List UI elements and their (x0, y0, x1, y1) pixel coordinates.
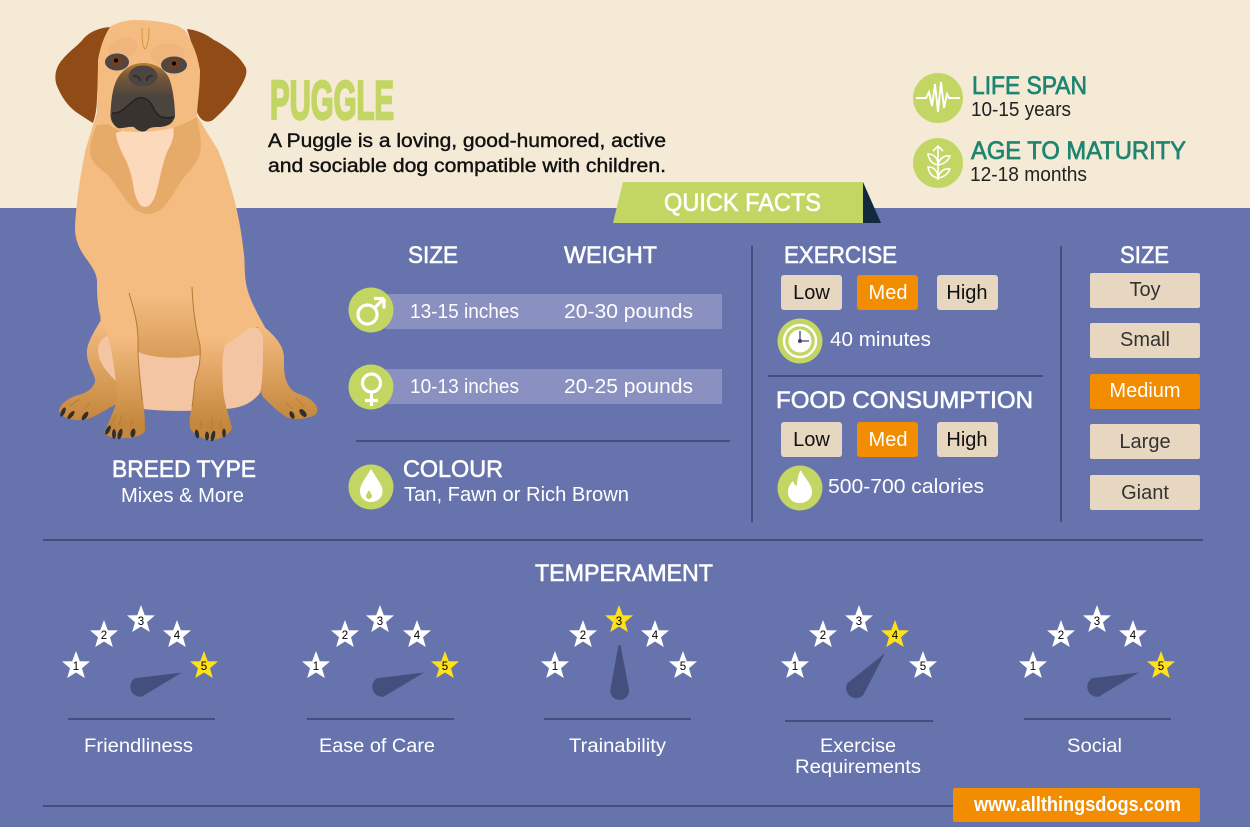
icon: age to maturity (913, 138, 963, 188)
exercise: 40 minutes (830, 329, 931, 351)
exercise level buttons: Low (793, 282, 830, 304)
breed type: Mixes & More (121, 485, 244, 507)
male row: 13-15 inches (410, 301, 519, 323)
gauge: social: 1 (1030, 661, 1036, 673)
size scale: Small (1120, 329, 1170, 351)
website badge (953, 788, 1200, 822)
gauge: social: 2 (1058, 630, 1064, 642)
title: PUGGLE (270, 69, 394, 131)
description: and sociable dog compatible with children. (268, 156, 666, 177)
life span text: LIFE SPAN (972, 72, 1087, 100)
gauge: ease of care: Ease of Care (319, 736, 435, 757)
size scale: Toy (1129, 279, 1161, 301)
female row: 10-13 inches (410, 376, 519, 398)
male row (348, 288, 722, 332)
age to maturity text (970, 137, 1186, 186)
website badge: www.allthingsdogs.com (973, 794, 1181, 816)
gauge: friendliness: 5 (201, 661, 207, 673)
main background (0, 208, 1250, 827)
exercise: EXERCISE (784, 242, 897, 269)
banner: quick facts: QUICK FACTS (664, 189, 821, 217)
size scale: Medium (1109, 380, 1181, 402)
gauge: social: Social (1067, 736, 1122, 757)
exercise level buttons: High (946, 282, 988, 304)
gauge: ease of care: 3 (377, 616, 383, 628)
colour (348, 456, 629, 510)
size and weight table (348, 242, 722, 410)
food consumption: FOOD CONSUMPTION (776, 387, 1033, 414)
muzzle (110, 63, 175, 131)
gauge: friendliness: Friendliness (84, 736, 193, 757)
food level buttons: Med (869, 429, 907, 451)
claws (59, 407, 308, 442)
banner: quick facts (613, 182, 881, 223)
gauge: ease of care: 4 (414, 630, 421, 642)
gauge: exercise requirements: Exercise (820, 736, 896, 757)
gauge: friendliness: 2 (101, 630, 107, 642)
female row: 20-25 pounds (564, 376, 693, 398)
gauge: friendliness: 3 (138, 616, 144, 628)
gauge: trainability: 3 (616, 616, 622, 628)
life span text (971, 72, 1087, 121)
gauge: trainability (541, 605, 697, 757)
gauge: exercise requirements: 3 (856, 616, 862, 628)
size heading: SIZE (408, 242, 458, 269)
header background (0, 0, 1250, 208)
breed type (112, 456, 256, 507)
left ear (55, 27, 110, 123)
food level buttons (781, 422, 998, 457)
age to maturity text: AGE TO MATURITY (971, 137, 1186, 165)
food consumption: 500-700 calories (828, 476, 984, 498)
breed type: BREED TYPE (112, 456, 256, 483)
icon: life span (913, 73, 963, 123)
gauge: exercise requirements: 1 (792, 661, 798, 673)
icon: flame (778, 466, 822, 510)
illustration: puggle dog (55, 20, 317, 442)
size scale: SIZE (1120, 242, 1169, 269)
gauge: trainability: Trainability (569, 736, 667, 757)
exercise (778, 242, 998, 364)
gauge: trainability: 1 (552, 661, 558, 673)
size scale: Giant (1121, 482, 1169, 504)
gauge: trainability: 4 (652, 630, 659, 642)
size scale: Large (1119, 431, 1171, 453)
gauge: ease of care: 2 (342, 630, 348, 642)
gauge: social: 5 (1158, 661, 1164, 673)
exercise level buttons (781, 275, 998, 310)
gauge: friendliness (62, 605, 218, 757)
gauge: social (1019, 605, 1175, 757)
male row: 20-30 pounds (564, 301, 693, 323)
weight heading: WEIGHT (564, 242, 657, 269)
gauge: social: 3 (1094, 616, 1100, 628)
food consumption (776, 387, 1033, 510)
icon: clock (778, 318, 822, 364)
gauge: trainability: 2 (580, 630, 586, 642)
eyes (105, 54, 129, 70)
food level buttons: High (946, 429, 988, 451)
gauge: exercise requirements: 4 (892, 630, 899, 642)
description: A Puggle is a loving, good-humored, active (268, 131, 666, 152)
food level buttons: Low (793, 429, 830, 451)
colour: COLOUR (403, 456, 503, 483)
gauge: social: 4 (1130, 630, 1137, 642)
colour: Tan, Fawn or Rich Brown (404, 484, 629, 506)
gauge: exercise requirements: 5 (920, 661, 926, 673)
nose (128, 66, 158, 86)
forehead wrinkle (142, 28, 149, 49)
bib (116, 127, 174, 207)
gauge: ease of care: 5 (442, 661, 448, 673)
gauge: exercise requirements: 2 (820, 630, 826, 642)
chest shading (90, 117, 201, 214)
gauge: exercise requirements (781, 605, 937, 778)
heading: temperament: TEMPERAMENT (535, 560, 713, 587)
right ear (187, 29, 246, 122)
gauge: ease of care: 1 (313, 661, 319, 673)
life span text: 10-15 years (971, 99, 1071, 121)
exercise level buttons: Med (869, 282, 907, 304)
gauge: friendliness: 4 (174, 630, 181, 642)
head (97, 20, 200, 132)
description (268, 131, 666, 177)
gauge: exercise requirements: Requirements (795, 757, 921, 778)
female row (348, 364, 722, 410)
age to maturity text: 12-18 months (970, 164, 1087, 186)
gauge: ease of care (302, 605, 459, 757)
gauge: friendliness: 1 (73, 661, 79, 673)
size scale (1090, 242, 1200, 510)
gauge: trainability: 5 (680, 661, 686, 673)
